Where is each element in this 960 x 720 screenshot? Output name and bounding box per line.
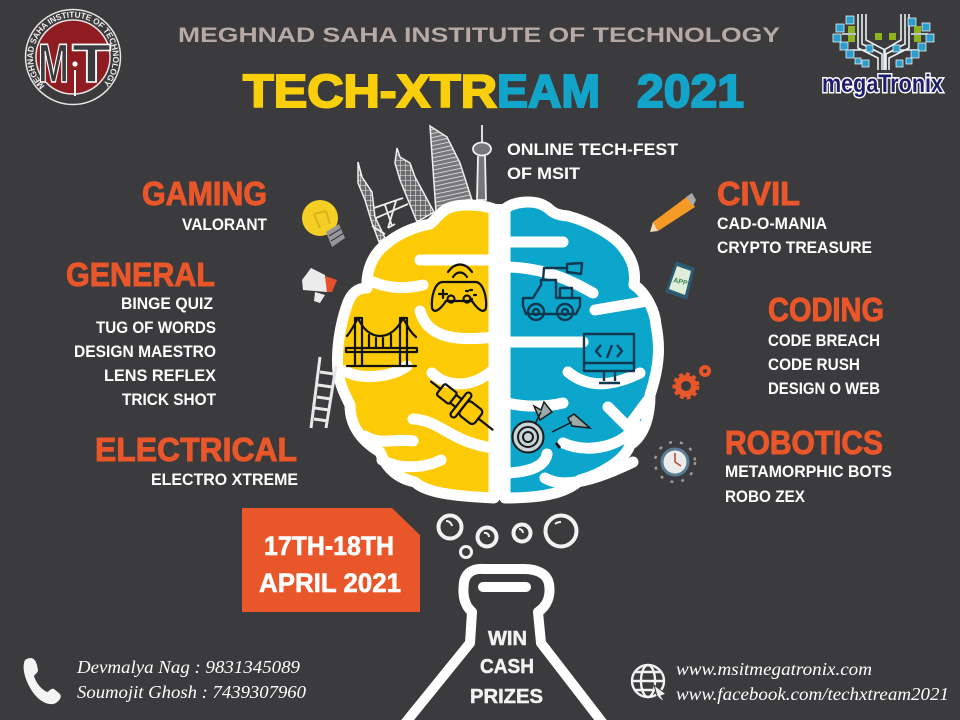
icon: megaphone [302, 268, 337, 303]
panel: general: TRICK SHOT [122, 391, 216, 409]
icon: electric plug [422, 370, 502, 441]
institute heading: MEGHNAD SAHA INSTITUTE OF TECHNOLOGY [178, 24, 780, 47]
callout: event dates: APRIL 2021 [259, 568, 401, 598]
title: Tech-Xtream 2021: TECH-XTR [243, 65, 497, 117]
title: Tech-Xtream 2021: EAM [497, 65, 600, 117]
panel: general: DESIGN MAESTRO [74, 343, 216, 361]
panel: coding: CODE BREACH [768, 332, 880, 350]
callout: event dates: 17TH-18TH [264, 531, 394, 561]
icon: globe and cursor [632, 665, 666, 702]
panel: robotics: ROBOTICS [725, 424, 883, 461]
icon: flask [406, 569, 602, 720]
panel: coding [768, 291, 884, 398]
icon: suspension bridge [346, 318, 417, 366]
callout: win cash prizes: PRIZES [470, 686, 543, 708]
contact names: Soumojit Ghosh : 7439307960 [77, 682, 306, 702]
title: Tech-Xtream 2021 [243, 65, 744, 117]
icon: city skyline [358, 125, 491, 242]
panel: gaming: VALORANT [182, 216, 267, 234]
panel: electrical: ELECTRICAL [95, 431, 297, 468]
panel: coding: CODE RUSH [768, 356, 860, 374]
icon: gears [674, 367, 709, 398]
callout: win cash prizes: CASH [480, 656, 534, 678]
icon: light bulb [302, 200, 345, 247]
logo: megaTronix: megaTronix [822, 70, 943, 98]
icon: game controller [432, 264, 486, 311]
panel: civil [717, 175, 872, 257]
panel: civil: CRYPTO TREASURE [717, 239, 872, 257]
tagline: OF MSIT [507, 165, 580, 183]
panel: general: LENS REFLEX [104, 367, 216, 385]
panel: robotics [725, 424, 892, 506]
brain: left yellow hemisphere [337, 205, 494, 498]
panel: gaming [142, 175, 267, 234]
panel: general: BINGE QUIZ [121, 295, 213, 313]
logo: MIT seal: T [72, 32, 111, 94]
icon: robot vehicle [523, 263, 582, 320]
logo: megaTronix [822, 14, 943, 98]
icon: bubbles [438, 516, 576, 558]
contact names [76, 657, 306, 702]
callout: win cash prizes [470, 628, 543, 708]
callout: event dates [242, 508, 420, 612]
web links: www.facebook.com/techxtream2021 [676, 684, 949, 704]
brain [337, 202, 658, 500]
contact names: Devmalya Nag : 9831345089 [76, 657, 300, 677]
tagline: ONLINE TECH-FEST [507, 141, 678, 159]
brain: right blue hemisphere [505, 202, 658, 498]
panel: civil: CAD-O-MANIA [717, 215, 827, 233]
brain: centre divide [493, 204, 506, 500]
logo: MIT seal: M [38, 32, 69, 94]
icon: app phone [665, 261, 695, 300]
tagline [507, 141, 678, 183]
panel: general: GENERAL [66, 256, 215, 293]
title: Tech-Xtream 2021: 2021 [637, 65, 744, 117]
callout: win cash prizes: WIN [488, 628, 527, 650]
web links: www.msitmegatronix.com [676, 659, 872, 679]
web links [676, 659, 949, 704]
brain: folds [345, 242, 648, 483]
panel: electrical [95, 431, 298, 489]
icon: telephone [24, 658, 61, 704]
panel: general: TUG OF WORDS [96, 319, 216, 337]
panel: civil: CIVIL [717, 175, 800, 212]
icon: app phone: APP [673, 277, 688, 288]
panel: coding: DESIGN O WEB [768, 380, 880, 398]
panel: robotics: METAMORPHIC BOTS [725, 463, 892, 481]
panel: robotics: ROBO ZEX [725, 488, 805, 506]
panel: general [66, 256, 216, 409]
panel: gaming: GAMING [142, 175, 267, 212]
panel: electrical: ELECTRO XTREME [151, 471, 298, 489]
panel: coding: CODING [768, 291, 884, 328]
logo: MIT seal: MEGHNAD SAHA INSTITUTE OF TECHNOLOGY [27, 12, 119, 90]
icon: target and arrows [512, 402, 590, 452]
icon: ladder [311, 357, 336, 428]
icon: code monitor [584, 334, 634, 383]
icon: stopwatch [655, 442, 695, 482]
icon: pencil [650, 193, 696, 232]
